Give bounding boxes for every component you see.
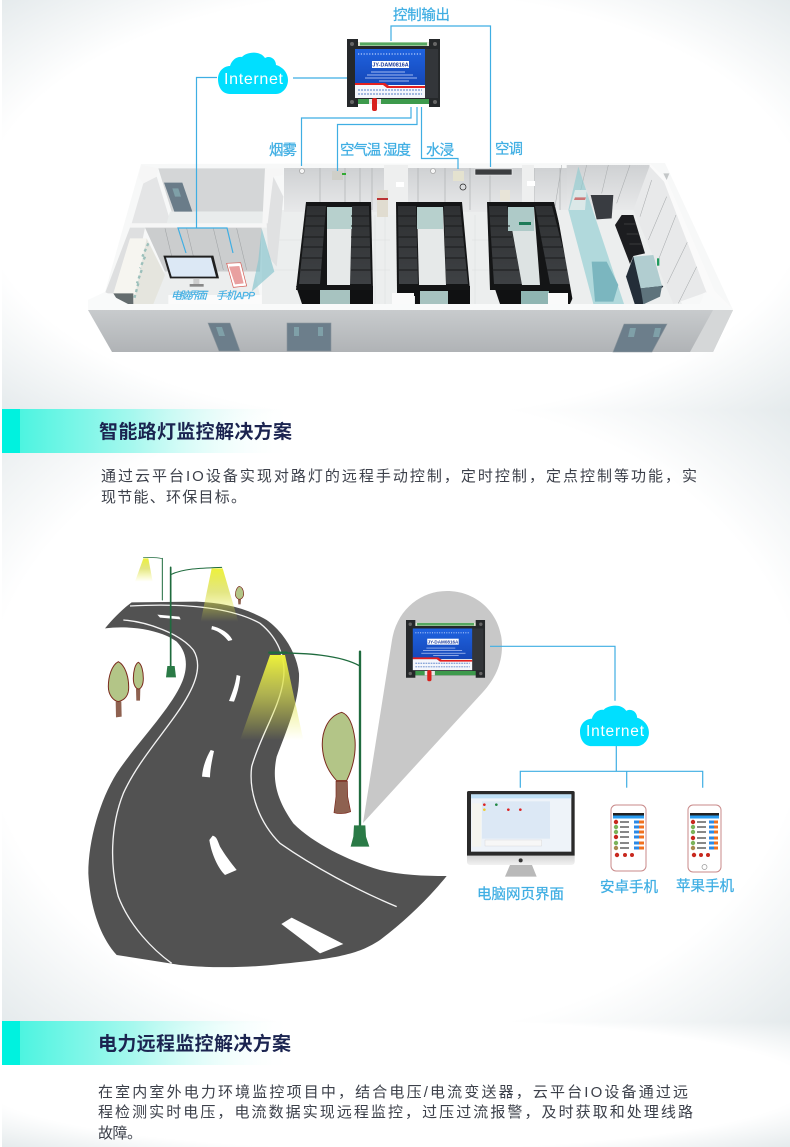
cooling unit [626, 257, 663, 305]
cloud: Internet top [218, 53, 288, 94]
gray callout balloon [363, 591, 502, 823]
building rim and main floor [88, 163, 733, 310]
heading bar: power monitoring: 电力远程监控解决方案 [98, 1032, 291, 1055]
rack row 3 [487, 202, 578, 304]
glass door [252, 228, 274, 292]
iphone [688, 805, 721, 872]
right room [550, 163, 732, 308]
label: android phone: 安卓手机 [600, 879, 658, 896]
front room walls [130, 223, 267, 228]
glass partition [568, 167, 624, 304]
server rack rows [296, 202, 578, 304]
white rim [649, 163, 732, 308]
back room walls [158, 168, 267, 212]
desk monitor [163, 256, 219, 287]
controller device: top [347, 39, 440, 111]
partition [267, 177, 283, 267]
trees [108, 586, 355, 814]
controller device: callout [406, 620, 485, 681]
left rooms [105, 165, 283, 305]
controller device: top: JY-DAM0816A [372, 63, 409, 69]
label: PC interface: 电脑界面 [171, 290, 208, 302]
label: PC web interface: 电脑网页界面 [477, 886, 564, 903]
paragraph: smart street lamp [101, 467, 697, 506]
desktop computer [467, 791, 575, 877]
paragraph: power monitoring [98, 1083, 693, 1142]
data center building illustration [88, 163, 733, 352]
paragraph: smart street lamp: 通过云平台IO设备实现对路灯的远程手动控制，定时控制，定点控制等功能，实 [101, 467, 697, 485]
front rim [550, 292, 732, 308]
front wall [88, 292, 733, 352]
left tree [108, 662, 129, 717]
label: water leak: 水浸 [426, 142, 454, 159]
back room door [164, 183, 192, 212]
sensors and wall devices [300, 168, 535, 217]
connection lines: street lamp diagram [490, 646, 703, 788]
far lamp [143, 557, 162, 600]
paragraph: power monitoring: 故障。 [98, 1124, 142, 1142]
cloud: Internet street lamp diagram [580, 706, 649, 746]
paragraph: power monitoring: 程检测实时电压，电流数据实现远程监控，过压过流报警，及时获取和处理线路 [98, 1104, 693, 1121]
android phone [611, 805, 646, 871]
white pedestals at front of floor [392, 293, 568, 305]
middle lamp [166, 567, 222, 677]
far tree [235, 586, 244, 604]
heading bar: smart street lamp: 智能路灯监控解决方案 [99, 420, 292, 443]
cloud: Internet top: Internet [224, 71, 284, 88]
road surface [88, 602, 447, 967]
rack row 2 [396, 202, 470, 304]
road centre dashes [157, 615, 343, 953]
dark cabinet [591, 195, 613, 219]
label: control output: 控制输出 [393, 7, 450, 24]
label: mobile app: 手机APP [216, 290, 255, 302]
label: air conditioner: 空调 [495, 141, 523, 158]
lamp beams [135, 558, 303, 740]
road illustration [88, 557, 447, 967]
paragraph: smart street lamp: 现节能、环保目标。 [101, 489, 246, 506]
cloud: Internet street lamp diagram: Internet [586, 723, 645, 740]
controller device: callout: JY-DAM0816A [428, 639, 459, 644]
near lamp [269, 652, 369, 847]
rack row 1 [296, 202, 373, 304]
label: air temperature and humidity: 空气温 湿度 [340, 142, 411, 159]
desk phone [227, 263, 247, 287]
label: apple phone: 苹果手机 [676, 878, 734, 895]
big tree [322, 712, 355, 814]
dark rack bank [615, 215, 645, 264]
right wall [633, 165, 708, 304]
white pedestal [168, 295, 262, 305]
road edge lines [113, 605, 397, 963]
door windows [216, 327, 661, 337]
label: smoke: 烟雾 [269, 142, 298, 159]
heading bar: smart street lamp [2, 409, 293, 453]
lockers [113, 238, 147, 303]
doors [208, 323, 667, 352]
second left tree [133, 662, 143, 701]
heading bar: power monitoring [2, 1021, 293, 1065]
connection lines: top diagram [178, 26, 490, 253]
street lamps [143, 557, 369, 847]
paragraph: power monitoring: 在室内室外电力环境监控项目中，结合电压/电流变送器，云平台IO设备通过远 [98, 1083, 688, 1101]
